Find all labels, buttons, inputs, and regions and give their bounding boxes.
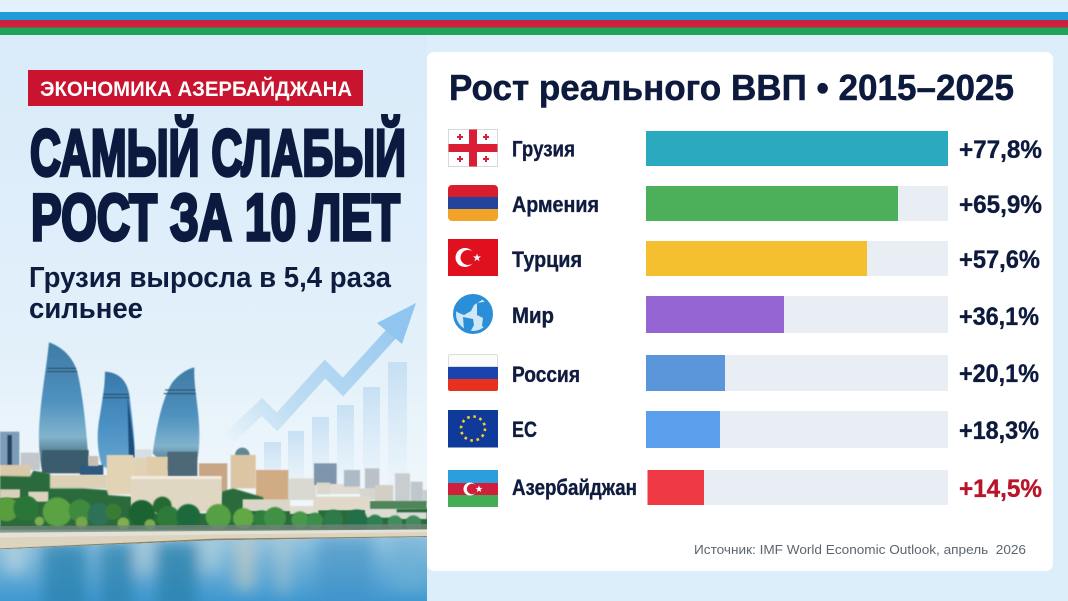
row: Russia: Россия	[512, 362, 580, 387]
row: World: +36,1%	[959, 303, 1039, 331]
front trees	[0, 496, 421, 531]
ghost bar chart	[264, 362, 407, 476]
panel: GDP growth chart	[427, 52, 1053, 571]
subtitle	[29, 262, 392, 325]
row: Russia: +20,1%	[959, 360, 1039, 388]
panel: left hero with skyline	[0, 303, 427, 601]
icon: flag of Turkey	[448, 239, 498, 276]
row: EU: +18,3%	[959, 417, 1039, 445]
icon: flag of Azerbaijan	[448, 470, 498, 507]
subtitle: Грузия выросла в 5,4 раза	[29, 262, 392, 294]
row: Turkey: Турция	[512, 247, 582, 272]
panel: headline block	[28, 70, 406, 325]
row: World: Мир	[512, 303, 554, 328]
row: Armenia: +65,9%	[959, 191, 1042, 219]
waterfront	[0, 533, 430, 601]
row: Azerbaijan	[448, 470, 1042, 507]
flag colour stripes	[0, 0, 1068, 35]
main title: САМЫЙ СЛАБЫЙ	[30, 114, 406, 190]
row: Georgia: Грузия	[512, 136, 575, 162]
section badge: ЭКОНОМИКА АЗЕРБАЙДЖАНА	[40, 77, 352, 101]
row: Armenia: Армения	[512, 192, 599, 217]
row: World	[454, 294, 1039, 336]
section badge	[28, 70, 363, 106]
row: Azerbaijan: +14,5%	[959, 475, 1042, 503]
subtitle: сильнее	[29, 293, 143, 325]
promenade	[0, 524, 430, 549]
growth arrow	[227, 303, 416, 440]
icon: globe	[454, 294, 495, 336]
row: EU: ЕС	[512, 417, 537, 442]
row: Turkey: +57,6%	[959, 246, 1040, 274]
row: Azerbaijan: Азербайджан	[512, 475, 637, 500]
icon: flag of Armenia	[448, 185, 498, 221]
main title: РОСТ ЗА 10 ЛЕТ	[31, 180, 400, 254]
front buildings	[0, 476, 427, 519]
icon: flag of Georgia	[448, 130, 498, 166]
main title	[30, 114, 406, 254]
flame towers	[39, 342, 199, 477]
icon: flag of EU	[448, 410, 498, 448]
background trees	[0, 471, 430, 530]
chart heading: Рост реального ВВП • 2015–2025	[449, 67, 1014, 108]
source note: Источник: IMF World Economic Outlook, апрель 2026	[694, 542, 1026, 557]
row: Russia	[448, 354, 1039, 391]
distant buildings	[0, 432, 430, 503]
row: Turkey	[448, 239, 1040, 276]
row: Georgia	[448, 130, 1042, 166]
city skyline illustration	[0, 432, 430, 601]
icon: flag of Russia	[448, 354, 498, 391]
row: Armenia	[448, 185, 1042, 221]
row: Georgia: +77,8%	[959, 136, 1042, 164]
row: EU	[448, 410, 1039, 448]
